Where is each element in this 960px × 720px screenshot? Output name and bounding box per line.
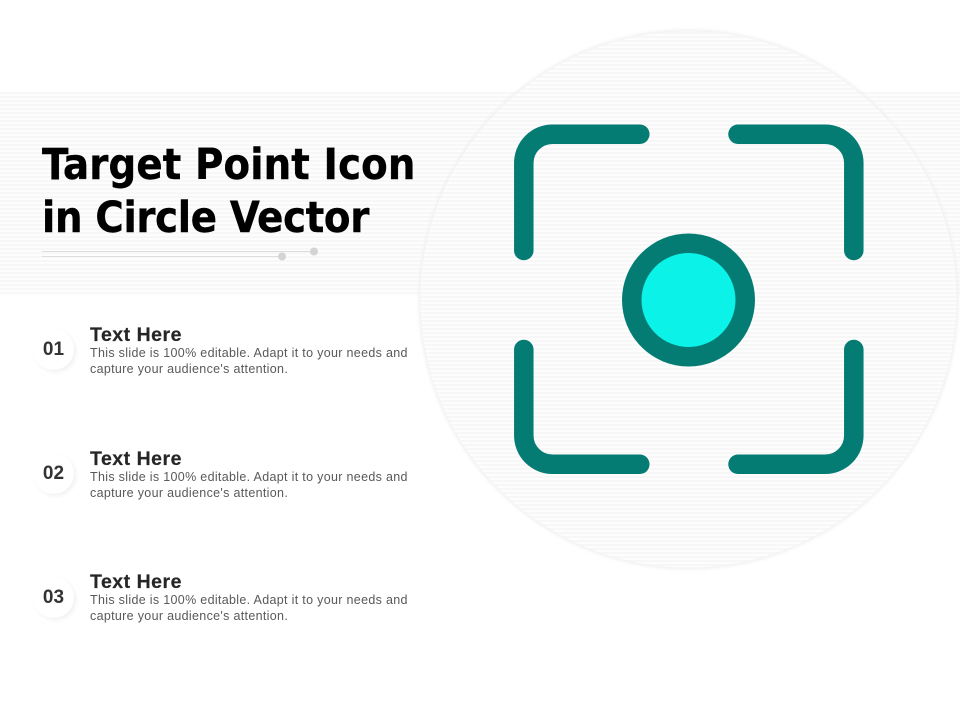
text block 03: Text Here xyxy=(90,571,182,593)
text block 03: This slide is 100% editable. Adapt it to your needs and xyxy=(90,593,408,607)
text block 01: Text Here xyxy=(90,324,182,346)
title: Target Point Icon xyxy=(42,140,416,190)
title xyxy=(42,140,416,243)
number badge 03 xyxy=(33,577,74,618)
number badge 02 xyxy=(33,453,74,494)
text block 02 xyxy=(90,448,408,500)
text block 01: This slide is 100% editable. Adapt it to your needs and xyxy=(90,346,408,360)
text block 02: Text Here xyxy=(90,448,182,470)
text block 02: capture your audience's attention. xyxy=(90,486,288,500)
number badge 02: 02 xyxy=(43,463,64,484)
title decorative connector lines xyxy=(42,248,318,260)
text block 01: capture your audience's attention. xyxy=(90,362,288,376)
number badge 01 xyxy=(33,329,74,370)
title: in Circle Vector xyxy=(42,193,369,243)
number badge 01: 01 xyxy=(43,339,64,360)
text block 03: capture your audience's attention. xyxy=(90,609,288,623)
icon: target corners xyxy=(524,134,854,464)
text block 02: This slide is 100% editable. Adapt it to your needs and xyxy=(90,470,408,484)
text block 01 xyxy=(90,324,408,376)
text block 03 xyxy=(90,571,408,623)
icon: target centre xyxy=(622,234,755,366)
number badge 03: 03 xyxy=(43,587,64,608)
